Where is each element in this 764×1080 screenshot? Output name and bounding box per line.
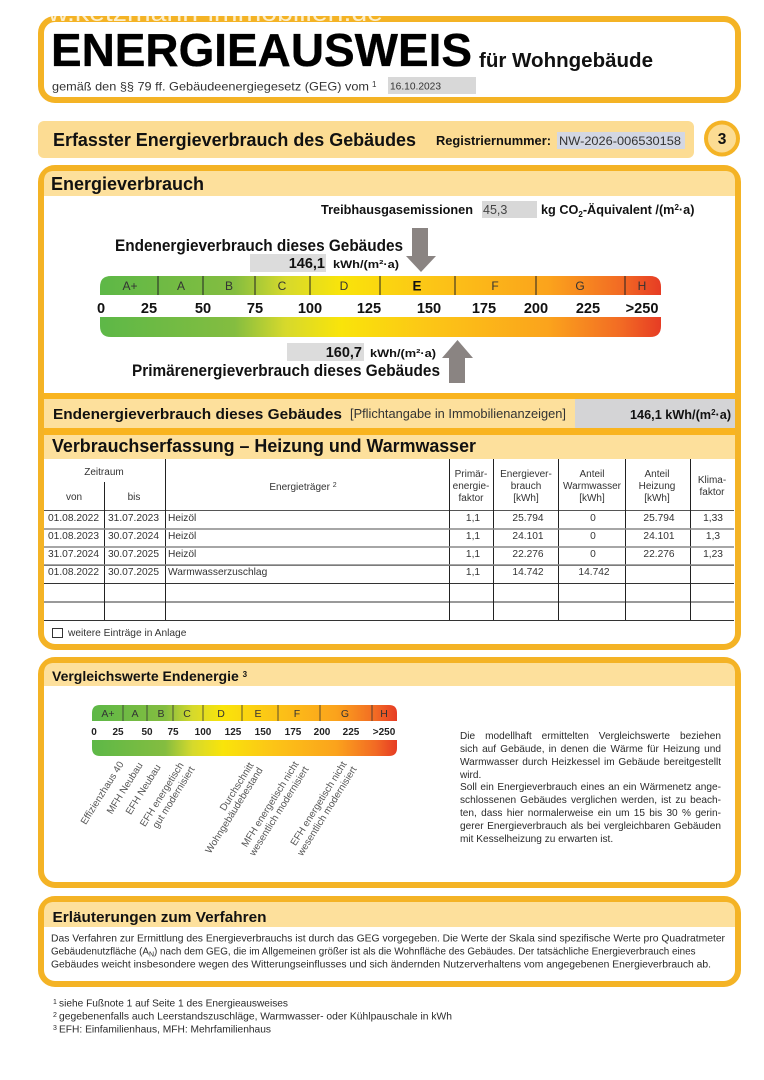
footnotes: [53, 998, 452, 1036]
table rows: 24.101: [512, 531, 544, 542]
small scale: numbers: [91, 727, 396, 738]
small scale: classes: B: [157, 708, 165, 720]
small scale: numbers: 125: [225, 727, 242, 738]
mandatory disclosure row: Endenergieverbrauch dieses Gebäudes: [53, 406, 342, 423]
scale: numbers: 25: [141, 301, 157, 317]
scale: letter classes: A+: [122, 279, 138, 293]
rotated building labels: EFH Neubau: [124, 763, 164, 817]
scale: numbers: 50: [195, 301, 211, 317]
panel: comparison values: [41, 660, 738, 885]
table rows: 1,1: [466, 549, 480, 560]
body text: N: [149, 952, 154, 958]
body text: Gebäudes weicht insbesondere wegen des Witterungseinflusses und sich ändernden Nutzerverhaltens vom angegebenen Energieverbrauch ab.: [51, 960, 711, 970]
small scale: numbers: 100: [195, 727, 212, 738]
scale: numbers: 175: [472, 301, 496, 317]
table rows: 30.07.2025: [108, 567, 159, 578]
emissions: kg CO: [541, 203, 578, 217]
consumption heading: [44, 435, 735, 459]
primary energy value: [287, 343, 436, 361]
emissions: 2: [674, 203, 679, 212]
table header: [66, 467, 726, 504]
table header: energie-: [453, 481, 489, 492]
scale: numbers: 225: [576, 301, 600, 317]
rotated building labels: EFH energetisch nicht: [289, 760, 350, 848]
table rows: 14.742: [512, 567, 544, 578]
small scale: numbers: 150: [255, 727, 272, 738]
section heading: Erfasster Energieverbrauch des Gebäudes: [53, 130, 416, 150]
panel: Energieverbrauch: [41, 168, 738, 647]
rotated building labels: Durchschnitt: [218, 761, 257, 813]
checkbox: further entries: weitere Einträge in Anlage: [67, 628, 187, 639]
primary energy value: kWh/(m²·a): [370, 348, 436, 360]
rotated building labels: EFH energetisch: [138, 761, 187, 829]
small scale: classes: C: [183, 708, 191, 720]
small scale: classes: A+: [101, 708, 115, 720]
emissions: 45,3: [483, 203, 507, 217]
table rows: 01.08.2022: [48, 567, 99, 578]
footnotes: 1: [53, 999, 57, 1006]
final energy label: Endenergieverbrauch dieses Gebäudes: [115, 237, 403, 255]
emissions: -Äquivalent /(m: [583, 202, 674, 217]
rotated building labels: Effizienzhaus 40: [79, 759, 127, 827]
scale: letter classes: F: [491, 279, 499, 293]
final energy value: [250, 254, 399, 272]
table header: Energieträger: [269, 482, 330, 493]
table rows: 01.08.2022: [48, 513, 99, 524]
rotated building labels: Wohngebäudebestand: [204, 766, 266, 856]
arrow: final energy: [406, 228, 436, 272]
scale: numbers: >250: [626, 301, 658, 317]
mandatory disclosure row: [44, 393, 735, 435]
primary energy label: Primärenergieverbrauch dieses Gebäudes: [132, 362, 440, 380]
table rows: 0: [590, 513, 596, 524]
explanatory text: [460, 731, 721, 845]
small scale: classes: G: [341, 708, 349, 720]
table header: [kWh]: [513, 493, 539, 504]
subtitle: für Wohngebäude: [479, 50, 653, 72]
page number badge: 3: [718, 131, 727, 148]
mandatory disclosure row: 146,1 kWh/(m: [630, 408, 711, 422]
rotated building labels: MFH energetisch nicht: [240, 760, 302, 849]
scale: letter classes: A: [177, 279, 185, 293]
scale: numbers: [97, 301, 658, 317]
scale: numbers: 125: [357, 301, 381, 317]
scale: numbers: 0: [97, 301, 105, 317]
table header: faktor: [458, 493, 484, 504]
small scale: classes: E: [254, 708, 262, 720]
title: ENERGIEAUSWEIS: [51, 24, 472, 76]
explanatory text: mit Kesselheizung zu erwarten ist.: [460, 834, 613, 845]
explanatory text: Soll ein Energieverbrauch eines an ein Wärmenetz ange-: [460, 782, 721, 793]
table header: [kWh]: [579, 493, 605, 504]
table header: Anteil: [644, 469, 670, 480]
mandatory disclosure row: [Pflichtangabe in Immobilienanzeigen]: [350, 407, 566, 421]
arrow: primary energy: [442, 340, 473, 383]
scale: numbers: 150: [417, 301, 441, 317]
consumption heading: Verbrauchserfassung – Heizung und Warmwasser: [52, 435, 476, 456]
small scale: numbers: 50: [141, 727, 153, 738]
small scale: gradient bar: [92, 740, 397, 756]
heading: Erläuterungen zum Verfahren: [52, 910, 266, 926]
footnotes: gegebenenfalls auch Leerstandszuschläge, Warmwasser- oder Kühlpauschale in kWh: [59, 1012, 452, 1022]
explanatory text: schlossenen Gebäudes verglichen werden, ist zu beach-: [460, 795, 721, 806]
emissions: 2: [578, 210, 583, 219]
small scale: numbers: >250: [373, 727, 396, 738]
heading: 3: [243, 670, 248, 679]
table rows: 30.07.2025: [108, 549, 159, 560]
table rows: 1,3: [706, 531, 720, 542]
small scale: numbers: 75: [167, 727, 179, 738]
small scale: classes: A: [131, 708, 139, 720]
scale: numbers: 200: [524, 301, 548, 317]
table rows: Warmwasserzuschlag: [168, 567, 268, 578]
page number badge: [706, 122, 738, 154]
table rows: 25.794: [643, 513, 675, 524]
table rows: 31.07.2023: [108, 513, 159, 524]
table rows: 1,23: [703, 549, 723, 560]
consumption table: [44, 459, 734, 639]
body text: Gebäudenutzfläche (A: [51, 946, 149, 958]
table rows: 22.276: [512, 549, 544, 560]
panel: title header: [41, 19, 738, 100]
explanatory text: Die modellhaft ermittelten Vergleichswerte beziehen: [460, 731, 721, 742]
table header: Zeitraum: [84, 467, 124, 478]
table header: [kWh]: [644, 493, 670, 504]
table rows: 1,33: [703, 513, 723, 524]
mandatory disclosure row: 2: [711, 408, 716, 417]
table header: Klima-: [698, 475, 726, 486]
table rows: 0: [590, 531, 596, 542]
scale: letter classes: B: [225, 279, 233, 293]
heading: Energieverbrauch: [51, 174, 204, 194]
table rows: Heizöl: [168, 513, 196, 524]
table rows: Heizöl: [168, 549, 196, 560]
scale: letter classes: H: [638, 279, 646, 293]
table header: brauch: [511, 481, 541, 492]
scale: letter classes: E: [412, 278, 422, 294]
registration number: NW-2026-006530158: [559, 134, 681, 148]
explanatory text: gerer Energieverbrauch als bei vergleichbaren Gebäuden: [460, 821, 721, 832]
table rows: 1,1: [466, 513, 480, 524]
table rows: 01.08.2023: [48, 531, 99, 542]
mandatory disclosure row: ·a): [716, 408, 731, 422]
heading: Vergleichswerte Endenergie: [52, 668, 239, 684]
table header: faktor: [699, 487, 725, 498]
small scale: numbers: 200: [314, 727, 331, 738]
scale: gradient bar: [100, 317, 661, 337]
scale: letter classes: C: [278, 279, 287, 293]
date field: [388, 77, 476, 94]
table rows: 25.794: [512, 513, 544, 524]
table header: Heizung: [639, 481, 675, 492]
footnotes: EFH: Einfamilienhaus, MFH: Mehrfamilienhaus: [59, 1024, 271, 1036]
emissions: ·a): [679, 203, 694, 217]
scale: letter classes: G: [575, 279, 585, 293]
table header: von: [66, 492, 82, 503]
panel: section band: [38, 121, 694, 158]
rotated building labels: MFH Neubau: [105, 761, 146, 816]
explanatory text: sich auf Gebäude, in denen die Wärme für Heizung und: [460, 744, 721, 755]
table header: Energiever-: [500, 469, 552, 480]
explanatory text: Warmwasser durch Heizkessel im Gebäude bereitgestellt: [460, 757, 721, 768]
small scale: numbers: 175: [285, 727, 302, 738]
footnote mark: 1: [372, 80, 377, 89]
small scale: classes: D: [217, 708, 225, 720]
table header: bis: [128, 492, 140, 503]
table rows: 0: [590, 549, 596, 560]
small scale: classes: [92, 705, 397, 721]
panel: explanations: [41, 899, 738, 984]
date field: 16.10.2023: [390, 82, 441, 92]
table header: Warmwasser: [563, 481, 622, 492]
table rows: 30.07.2024: [108, 531, 159, 542]
emissions: Treibhausgasemissionen: [321, 203, 473, 217]
footnotes: 2: [53, 1012, 57, 1019]
table rows: 24.101: [643, 531, 675, 542]
scale: letter classes: D: [340, 279, 349, 293]
scale: numbers: 100: [298, 301, 322, 317]
small scale: classes: F: [294, 708, 300, 720]
rotated building labels: wesentlich modernisiert: [295, 765, 360, 859]
explanatory text: wird.: [460, 770, 481, 781]
rotated building labels: [79, 759, 360, 859]
final energy value: kWh/(m²·a): [333, 259, 399, 271]
table rows: 1,1: [466, 531, 480, 542]
small scale: numbers: 25: [112, 727, 124, 738]
rotated building labels: wesentlich modernisiert: [247, 765, 312, 859]
rotated building labels: gut modernisiert: [151, 765, 198, 831]
small scale: numbers: 225: [343, 727, 360, 738]
body text: Das Verfahren zur Ermittlung des Energieverbrauchs ist durch das GEG vorgegeben. Die Werte der Skala sind spezifische Werte pro Quadratmeter: [51, 934, 726, 944]
table header: 2: [333, 482, 337, 489]
table rows: 14.742: [578, 567, 610, 578]
table rows: 31.07.2024: [48, 549, 99, 560]
emissions: [321, 201, 694, 219]
table header: Anteil: [579, 469, 605, 480]
table rows: 22.276: [643, 549, 675, 560]
scale: numbers: 75: [247, 301, 263, 317]
table header: Primär-: [455, 469, 487, 480]
footnotes: 3: [53, 1025, 57, 1032]
table rows: Heizöl: [168, 531, 196, 542]
explanatory text: ten, dass hier normalerweise ein um 15 bis 30 % gerin-: [460, 808, 721, 819]
primary energy value: 160,7: [326, 345, 362, 361]
registration label: Registriernummer:: [436, 133, 551, 148]
final energy value: 146,1: [289, 256, 325, 272]
table rows: 1,1: [466, 567, 480, 578]
footnotes: siehe Fußnote 1 auf Seite 1 des Energieausweises: [59, 998, 288, 1010]
table rows: [48, 513, 723, 578]
scale: letter classes: [100, 276, 661, 295]
small scale: numbers: 0: [91, 727, 97, 738]
small scale: classes: H: [380, 708, 388, 720]
body text: ) nach dem GEG, die im Allgemeinen größer ist als die Wohnfläche des Gebäudes. Der tatsächliche Energieverbrauch eines: [154, 946, 696, 958]
legal basis: gemäß den §§ 79 ff. Gebäudeenergiegesetz (GEG) vom: [52, 80, 369, 94]
body text: [51, 934, 726, 970]
